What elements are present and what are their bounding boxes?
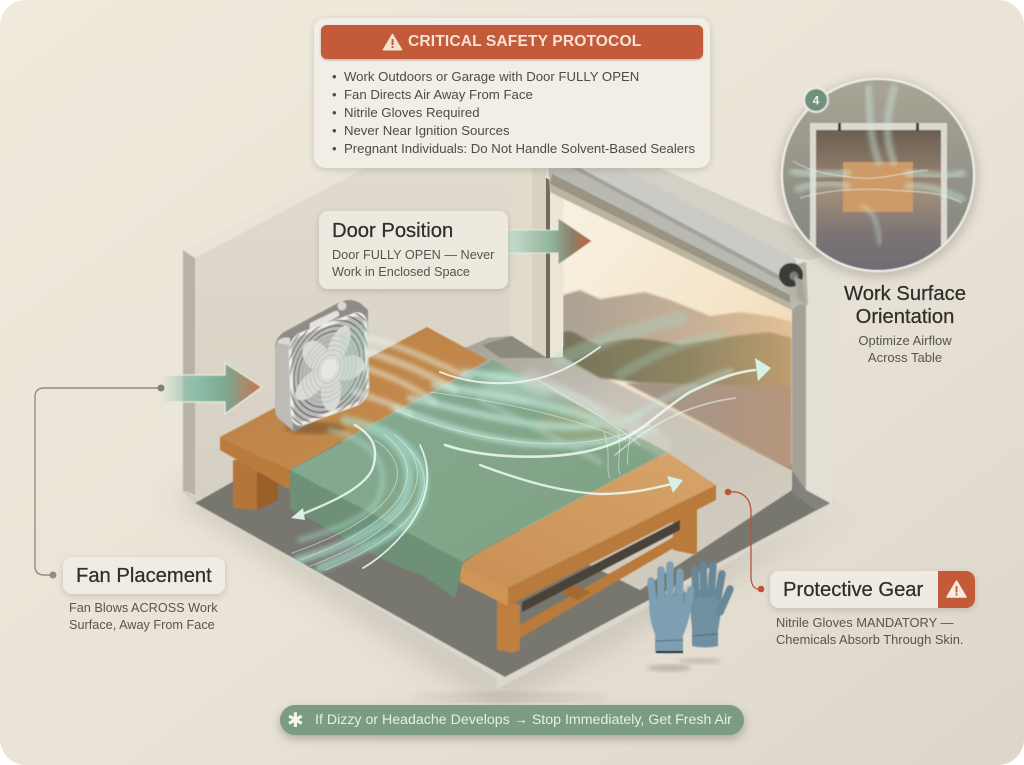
panel heading bar [321, 25, 703, 59]
right door frame and roller [548, 168, 842, 510]
connector: protective gear [725, 489, 764, 592]
description: Work in Enclosed Space [332, 264, 470, 278]
airflow arrow to doorway upper [440, 347, 600, 383]
box fan [274, 300, 370, 436]
heading pill: Protective Gear [783, 579, 923, 601]
number badge text: 4 [813, 94, 820, 108]
heading pill [770, 571, 975, 608]
safety checklist: • Never Near Ignition Sources [332, 123, 510, 138]
safety checklist: • Pregnant Individuals: Do Not Handle Solvent-Based Sealers [332, 141, 695, 156]
description: Door FULLY OPEN — Never [332, 248, 494, 262]
safety checklist [332, 69, 695, 156]
description: Surface, Away From Face [69, 618, 215, 632]
description [858, 333, 952, 364]
arrow: door position [505, 218, 592, 265]
right glove [691, 565, 730, 648]
table top left end [220, 327, 488, 490]
doorway landscape [546, 175, 792, 470]
fine airflow strands [292, 392, 650, 570]
heading: Work Surface [844, 283, 966, 305]
panel: fan placement [60, 556, 228, 632]
callout: work surface orientation [844, 283, 966, 364]
table legs [233, 460, 697, 653]
airflow arrow over table [480, 465, 672, 494]
safety checklist: • Work Outdoors or Garage with Door FULLY OPEN [332, 69, 639, 84]
connector: fan placement [35, 384, 164, 578]
airflow arrowheads [291, 358, 771, 520]
heading [844, 283, 966, 328]
panel: protective gear [768, 570, 978, 646]
icon: medical star: ✱ [287, 708, 304, 732]
description: Chemicals Absorb Through Skin. [776, 632, 964, 646]
warning icon [382, 34, 402, 50]
description [332, 248, 494, 278]
arrow: fan placement [160, 363, 262, 414]
airflow swirl left [295, 425, 375, 517]
left glove [649, 565, 692, 654]
banner text: If Dizzy or Headache Develops → Stop Immediately, Get Fresh Air [315, 712, 732, 728]
airflow arrow to doorway [445, 370, 755, 457]
warning icon tile [938, 571, 975, 608]
description: Optimize Airflow [858, 333, 952, 348]
table top right end [460, 452, 716, 606]
panel: door position [319, 211, 508, 289]
description [776, 615, 964, 646]
stream wash over wood and cloth [355, 338, 470, 414]
callout: first-aid banner [280, 705, 744, 735]
airflow streams [291, 318, 771, 570]
description: Across Table [868, 350, 942, 364]
room shell [175, 168, 850, 710]
description [69, 601, 218, 632]
safety checklist: • Nitrile Gloves Required [332, 105, 480, 120]
heading pill [63, 557, 225, 594]
panel: critical safety protocol [314, 18, 710, 168]
safety checklist: • Fan Directs Air Away From Face [332, 87, 533, 102]
heading: Orientation [856, 306, 954, 328]
bottom room shadow [410, 692, 610, 702]
inset circle: work surface orientation [778, 78, 978, 290]
description: Nitrile Gloves MANDATORY — [776, 615, 953, 630]
airflow swirl lower [363, 445, 427, 568]
description: Fan Blows ACROSS Work [69, 601, 218, 615]
icon: nitrile gloves [647, 565, 730, 672]
heading pill: Fan Placement [76, 565, 212, 587]
table [220, 327, 716, 653]
green drop cloth [290, 360, 667, 597]
heading text: CRITICAL SAFETY PROTOCOL [408, 33, 641, 50]
heading: Door Position [332, 220, 453, 242]
